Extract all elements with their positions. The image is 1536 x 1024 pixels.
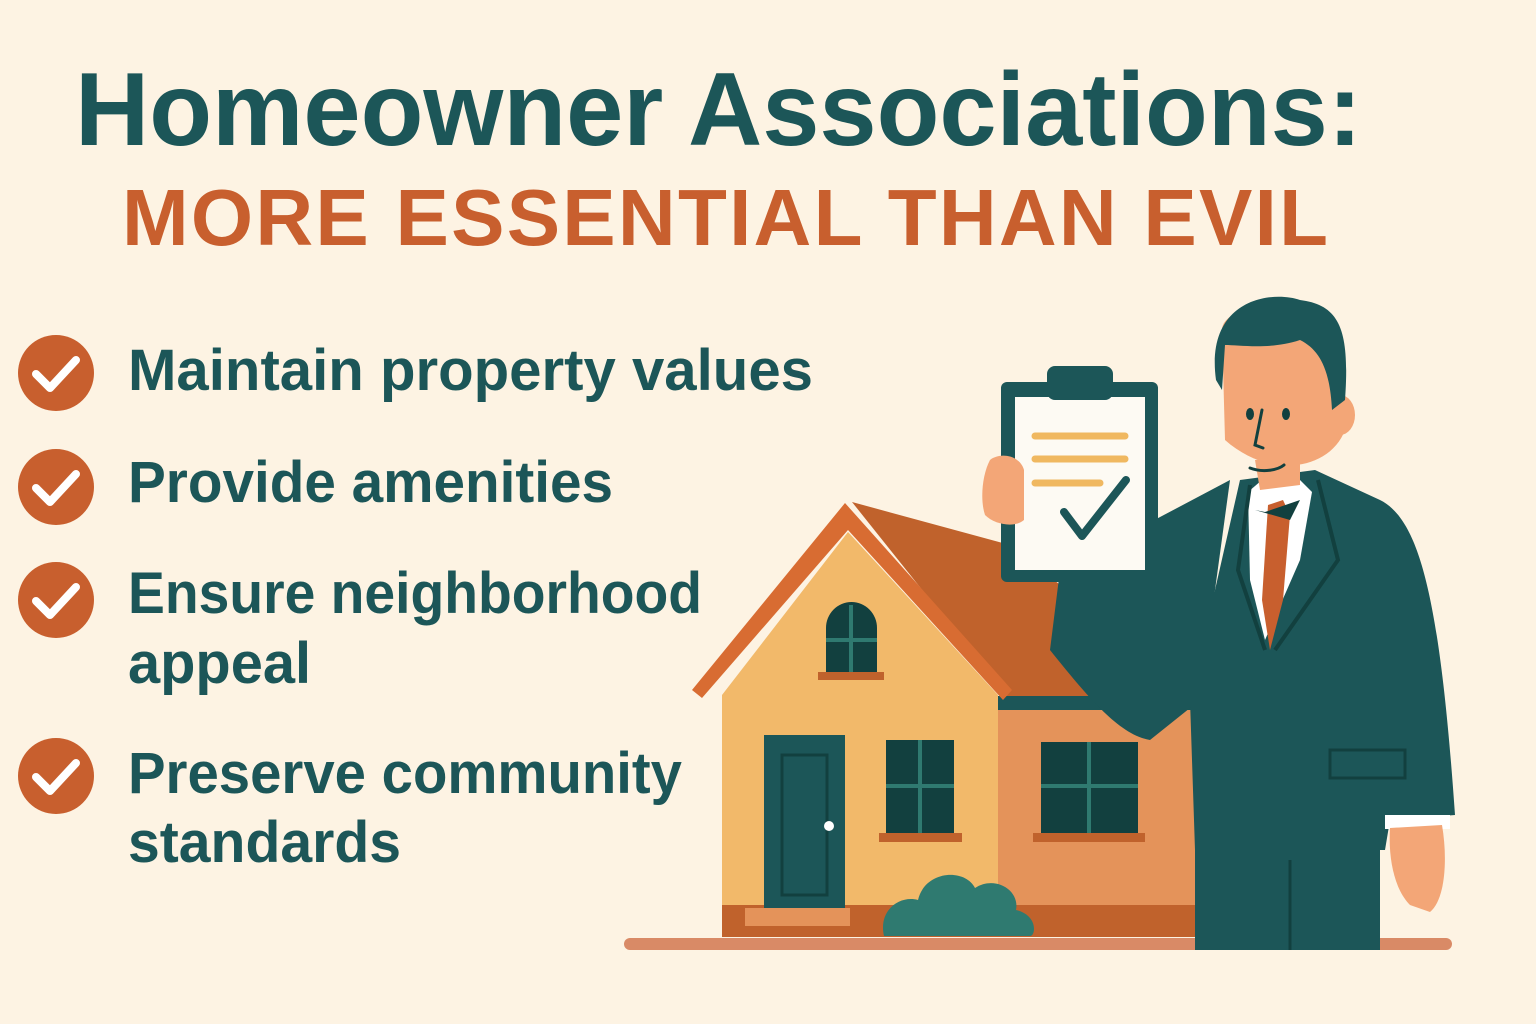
bush xyxy=(883,875,1034,936)
item 4: Preserve community xyxy=(128,741,682,806)
body xyxy=(1190,470,1455,850)
neck xyxy=(1255,455,1300,490)
house xyxy=(692,502,1195,937)
hair xyxy=(1215,297,1346,410)
head xyxy=(1222,304,1345,465)
item 2 xyxy=(18,449,613,525)
door xyxy=(764,735,845,908)
arm xyxy=(1050,480,1230,740)
right hand xyxy=(1390,825,1445,912)
item 1: Maintain property values xyxy=(128,338,813,403)
item 3: Ensure neighborhood xyxy=(128,561,702,626)
windows xyxy=(886,740,954,835)
pants xyxy=(1195,850,1380,950)
left hand xyxy=(982,456,1024,525)
arched window xyxy=(826,602,877,672)
clipboard xyxy=(982,366,1158,582)
item 2: Provide amenities xyxy=(128,450,613,515)
item 3 xyxy=(18,561,702,696)
ground line xyxy=(624,938,1452,950)
item 3: appeal xyxy=(128,631,311,696)
subtitle: MORE ESSENTIAL THAN EVIL xyxy=(122,173,1328,262)
man xyxy=(1050,297,1455,950)
item 4 xyxy=(18,738,682,875)
list: benefits xyxy=(18,335,813,875)
title: Homeowner Associations: xyxy=(75,52,1362,168)
item 4: standards xyxy=(128,810,401,875)
